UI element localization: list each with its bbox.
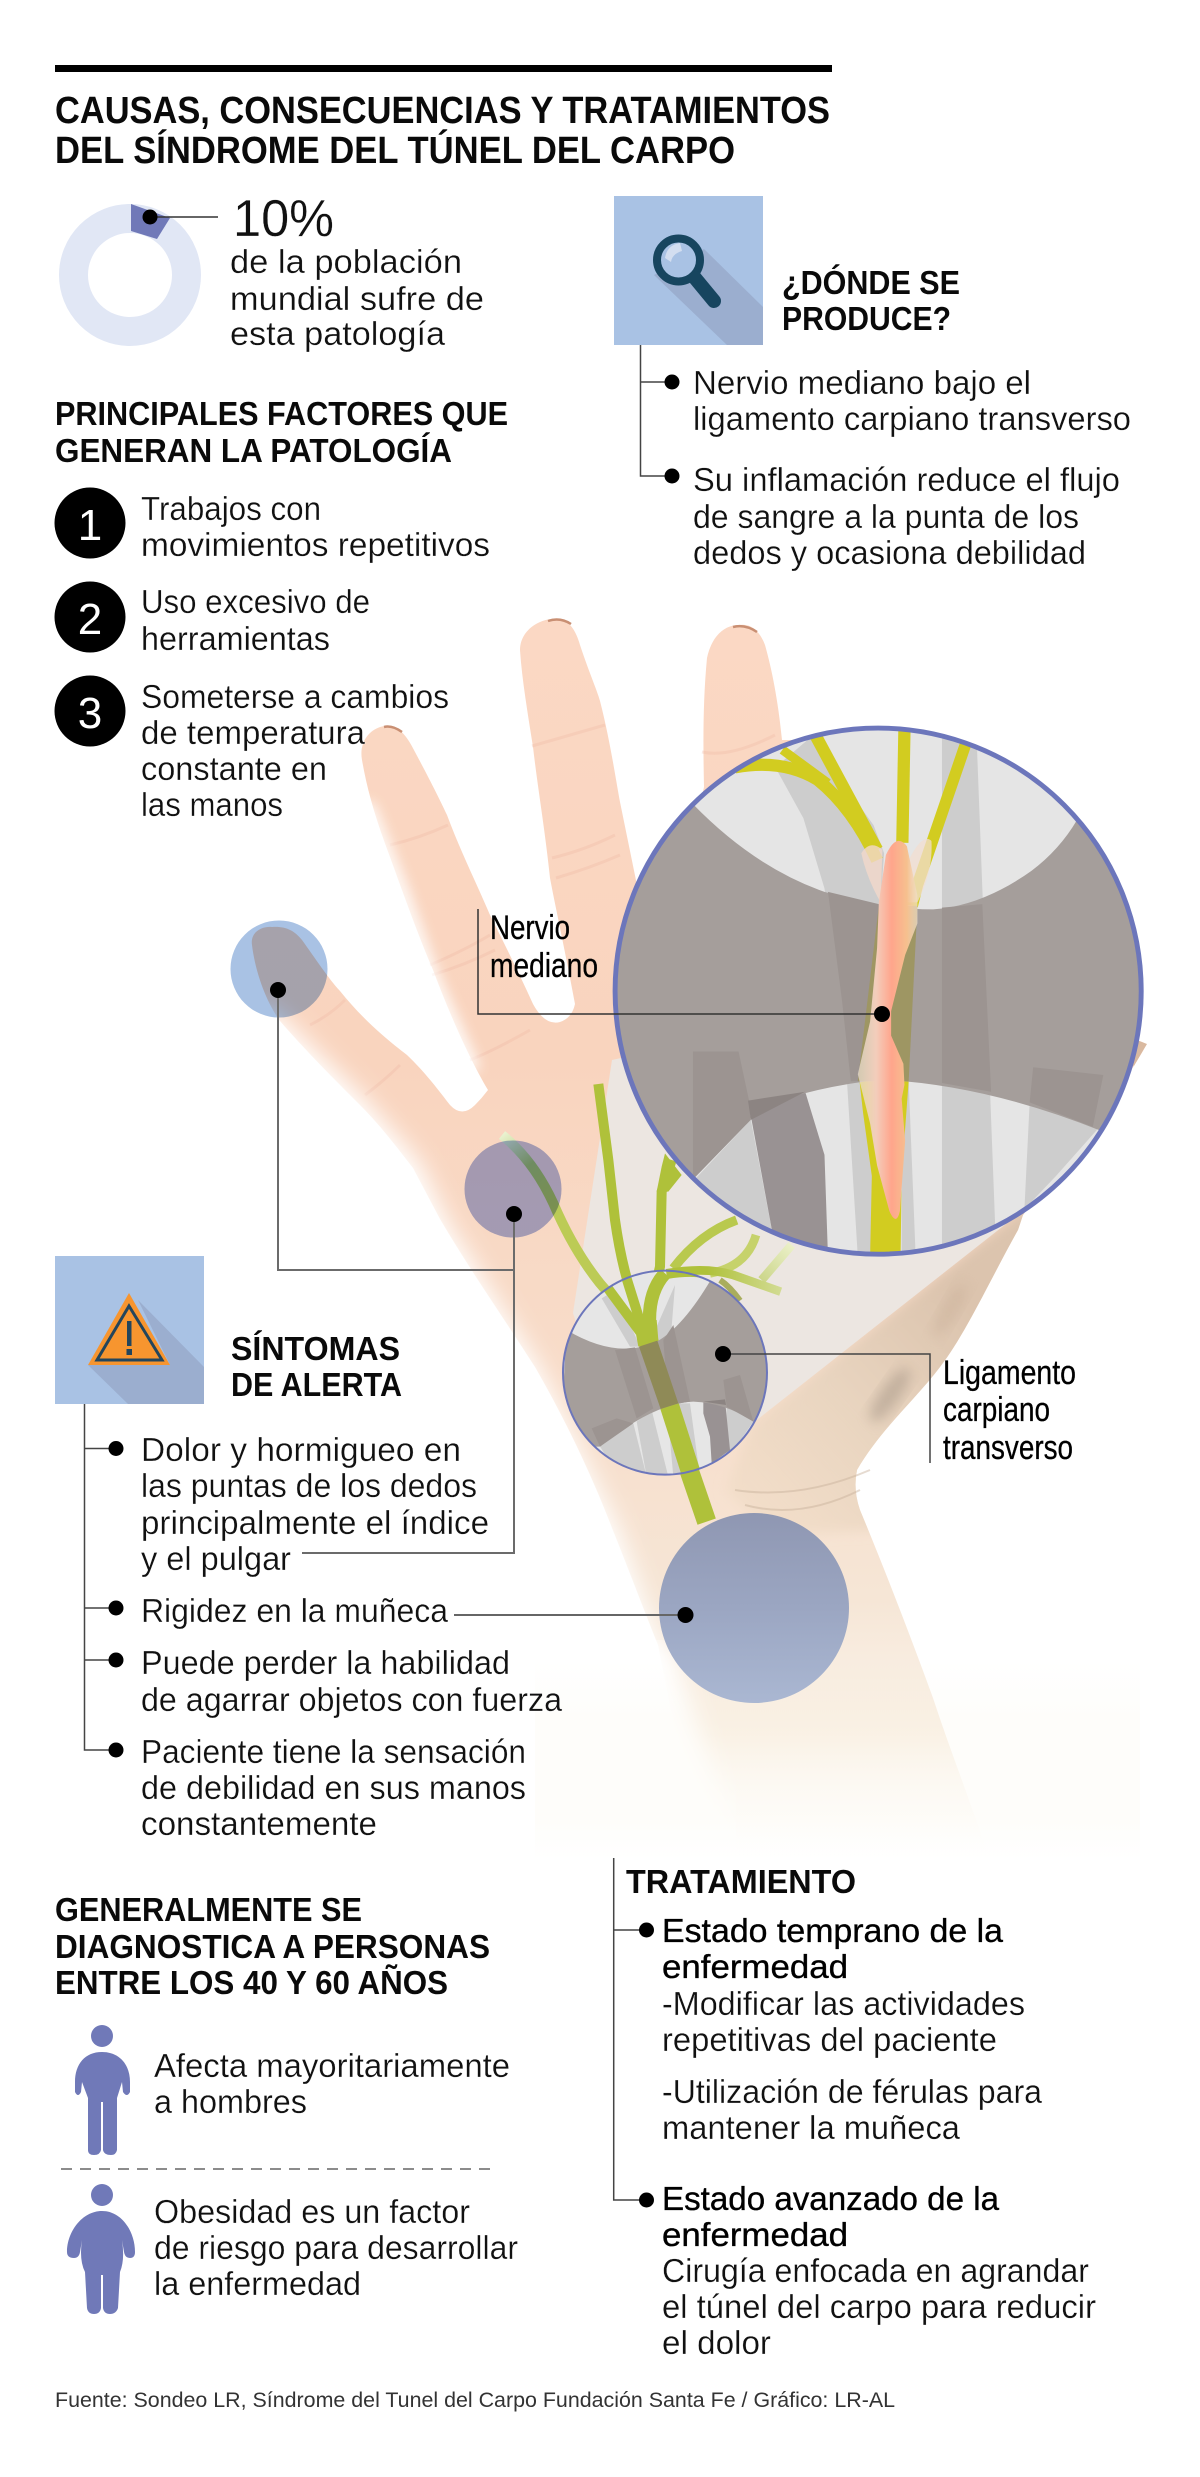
callout: transverse carpal ligament: Ligamento — [943, 1354, 1076, 1392]
factor 3 — [54, 676, 449, 823]
symptom circle: wrist — [659, 1513, 849, 1703]
factor 1 — [54, 488, 490, 563]
text: obesity risk: Obesidad es un factor — [154, 2193, 470, 2230]
factor 3: 3 — [78, 689, 102, 738]
symptoms text: de agarrar objetos con fuerza — [141, 1681, 563, 1718]
zoom circle: small carpal ligament — [562, 1270, 768, 1476]
top rule — [55, 65, 832, 72]
factor 1: Trabajos con — [141, 490, 321, 527]
heading: where: PRODUCE? — [782, 300, 951, 337]
text: mostly men: Afecta mayoritariamente — [154, 2047, 510, 2084]
zoom circle: large median nerve detail — [607, 725, 1147, 1258]
factor 3: de temperatura — [141, 714, 366, 751]
factor 3: constante en — [141, 750, 327, 787]
where text: Nervio mediano bajo el — [693, 364, 1031, 401]
symptom circle: thumb base — [464, 1140, 562, 1238]
treatment: early stage: mantener la muñeca — [662, 2109, 961, 2146]
icon: person — [75, 2025, 130, 2155]
factor 2 — [54, 582, 370, 657]
treatment: advanced stage: enfermedad — [662, 2216, 848, 2253]
callout: transverse carpal ligament: transverso — [943, 1429, 1073, 1467]
treatment: early stage: enfermedad — [662, 1948, 848, 1985]
symptoms text: Paciente tiene la sensación — [141, 1733, 526, 1770]
where text: de sangre a la punta de los — [693, 498, 1079, 535]
stat: 10% of population: esta patología — [230, 315, 446, 352]
text: mostly men — [154, 2047, 510, 2120]
where text: Su inflamación reduce el flujo — [693, 461, 1120, 498]
factor 1: 1 — [78, 501, 102, 550]
hand illustration — [252, 619, 1147, 1880]
treatment: early stage — [662, 1912, 1043, 2146]
factor 2: Uso excesivo de — [141, 583, 370, 620]
heading: warning symptoms: DE ALERTA — [231, 1366, 402, 1403]
callout: median nerve: Nervio — [490, 909, 570, 947]
nerve branches — [502, 1084, 792, 1522]
heading: where — [782, 264, 960, 337]
title: DEL SÍNDROME DEL TÚNEL DEL CARPO — [55, 128, 735, 172]
heading: warning symptoms: SÍNTOMAS — [231, 1330, 400, 1367]
factor 3: Someterse a cambios — [141, 678, 449, 715]
heading: warning symptoms — [231, 1330, 402, 1403]
heading: diagnosis age: DIAGNOSTICA A PERSONAS — [55, 1928, 490, 1965]
treatment: early stage: -Utilización de férulas para — [662, 2073, 1043, 2110]
treatment: advanced stage: el túnel del carpo para reducir — [662, 2288, 1096, 2325]
factor 2: herramientas — [141, 620, 330, 657]
treatment: advanced stage — [662, 2180, 1096, 2361]
text: mostly men: a hombres — [154, 2083, 307, 2120]
treatment: early stage: -Modificar las actividades — [662, 1985, 1025, 2022]
callout: median nerve: mediano — [490, 947, 598, 985]
text: obesity risk: la enfermedad — [154, 2265, 361, 2302]
stat: 10% of population: mundial sufre de — [230, 280, 484, 317]
symptoms text: las puntas de los dedos — [141, 1467, 477, 1504]
callout: transverse carpal ligament — [715, 1346, 1076, 1467]
icon: obese person — [67, 2184, 135, 2314]
icon: warning triangle — [55, 1256, 204, 1404]
palm translucent overlay — [573, 1000, 1100, 1475]
donut chart: 10% — [74, 204, 218, 332]
treatment: advanced stage: Estado avanzado de la — [662, 2180, 1000, 2217]
title: CAUSAS, CONSECUENCIAS Y TRATAMIENTOS — [55, 90, 830, 132]
symptoms text: constantemente — [141, 1805, 377, 1842]
treatment: early stage: Estado temprano de la — [662, 1912, 1004, 1949]
symptoms text: Dolor y hormigueo en — [141, 1431, 461, 1468]
stat: 10% of population: de la población — [230, 243, 462, 280]
symptom circle: finger tip — [230, 920, 328, 1018]
heading: treatment: TRATAMIENTO — [626, 1863, 856, 1900]
where list connector — [640, 345, 680, 484]
treatment: early stage: repetitivas del paciente — [662, 2021, 997, 2058]
text: obesity risk — [154, 2193, 518, 2302]
symptoms text: principalmente el índice — [141, 1504, 489, 1541]
treatment connector — [614, 1858, 654, 2208]
source: Fuente: Sondeo LR, Síndrome del Tunel del Carpo Fundación Santa Fe / Gráfico: LR-AL — [55, 2389, 895, 2412]
symptoms text: de debilidad en sus manos — [141, 1769, 526, 1806]
where text: dedos y ocasiona debilidad — [693, 534, 1086, 571]
treatment: advanced stage: Cirugía enfocada en agrandar — [662, 2252, 1089, 2289]
callout: median nerve — [478, 909, 890, 1022]
heading: main factors — [55, 395, 508, 469]
treatment: advanced stage: el dolor — [662, 2324, 771, 2361]
connector: wrist symptom — [454, 1607, 694, 1623]
heading: diagnosis age: GENERALMENTE SE — [55, 1891, 362, 1928]
where text: ligamento carpiano transverso — [693, 400, 1131, 437]
heading: diagnosis age: ENTRE LOS 40 Y 60 AÑOS — [55, 1964, 448, 2001]
symptoms text: Rigidez en la muñeca — [141, 1592, 449, 1629]
symptoms list connector — [84, 1404, 124, 1758]
factor 1: movimientos repetitivos — [141, 526, 490, 563]
symptoms text: y el pulgar — [141, 1540, 291, 1577]
title — [55, 90, 830, 172]
symptoms text — [141, 1431, 563, 1842]
icon: magnifying glass — [614, 196, 763, 345]
heading: where: ¿DÓNDE SE — [782, 264, 960, 301]
heading: main factors: PRINCIPALES FACTORES QUE — [55, 395, 508, 432]
heading: diagnosis age — [55, 1891, 490, 2001]
symptoms text: Puede perder la habilidad — [141, 1644, 510, 1681]
stat: 10% of population — [230, 190, 484, 352]
callout: transverse carpal ligament: carpiano — [943, 1391, 1050, 1429]
connector: finger tips symptom — [270, 982, 522, 1553]
heading: main factors: GENERAN LA PATOLOGÍA — [55, 432, 452, 469]
factor 2: 2 — [78, 595, 102, 644]
factor 3: las manos — [141, 786, 283, 823]
text: obesity risk: de riesgo para desarrollar — [154, 2229, 518, 2266]
where text — [693, 364, 1131, 571]
stat: 10% of population: 10% — [233, 190, 334, 248]
